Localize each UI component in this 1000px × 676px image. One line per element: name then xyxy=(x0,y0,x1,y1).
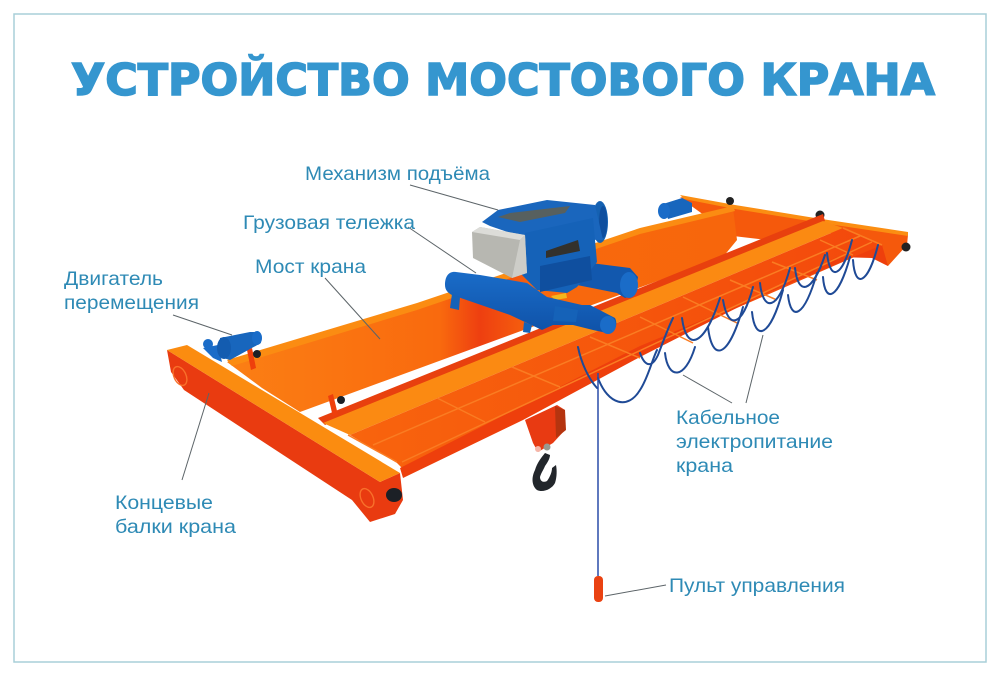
label: end beams: балки крана xyxy=(115,516,236,538)
far girder: bridge xyxy=(227,206,737,412)
overhead crane illustration xyxy=(167,195,910,602)
bolt xyxy=(386,488,402,502)
trolley xyxy=(445,200,638,334)
right drive xyxy=(577,262,638,298)
leader: cable 1 xyxy=(683,375,732,403)
bolts far end beam xyxy=(726,197,910,252)
leader: end beams xyxy=(182,393,209,480)
label: travel motor: Двигатель xyxy=(64,268,163,290)
leader: cable 2 xyxy=(746,335,763,403)
yellow gap xyxy=(551,293,567,300)
label: end beams: Концевые xyxy=(115,492,213,514)
label: bridge: Мост крана xyxy=(255,256,366,278)
pendant wire xyxy=(597,373,599,576)
drum wheel xyxy=(592,201,608,243)
label: end beams xyxy=(115,492,236,538)
far motor (right) xyxy=(658,198,692,219)
side rail xyxy=(318,214,825,425)
outer side xyxy=(400,245,888,478)
pendant control xyxy=(594,576,603,602)
body xyxy=(522,218,597,293)
front face xyxy=(167,350,403,522)
top face xyxy=(167,345,400,482)
far end beam xyxy=(680,195,910,266)
title: УСТРОЙСТВО МОСТОВОГО КРАНА xyxy=(71,53,935,106)
main long beam and drive xyxy=(445,272,616,333)
near girder xyxy=(318,214,888,478)
label: cable power: электропитание xyxy=(676,431,833,453)
label: trolley: Грузовая тележка xyxy=(243,212,415,234)
near motor (left) xyxy=(203,331,262,362)
label: control pendant: Пульт управления xyxy=(669,575,845,597)
label: lifting mechanism: Механизм подъёма xyxy=(305,163,490,185)
leader: lifting mechanism xyxy=(410,185,498,210)
wheel plate left xyxy=(170,364,377,510)
leader: pendant xyxy=(605,585,666,596)
hook xyxy=(533,453,557,491)
leader: trolley xyxy=(408,227,476,273)
label: travel motor: перемещения xyxy=(64,292,199,314)
leader: bridge xyxy=(325,278,380,339)
top walkway xyxy=(323,221,843,435)
hook block xyxy=(525,405,566,491)
grey box xyxy=(472,227,527,278)
left end beam xyxy=(167,345,403,522)
label: cable power xyxy=(676,407,833,477)
bracket xyxy=(247,348,256,370)
label: travel motor xyxy=(64,268,199,314)
label: cable power: Кабельное xyxy=(676,407,780,429)
leader: motor xyxy=(173,315,232,335)
deck lines xyxy=(348,228,882,462)
drum window xyxy=(546,240,580,258)
label: cable power: крана xyxy=(676,455,733,477)
deck xyxy=(350,228,882,470)
festoon cable xyxy=(578,240,878,402)
top frame xyxy=(482,200,603,240)
